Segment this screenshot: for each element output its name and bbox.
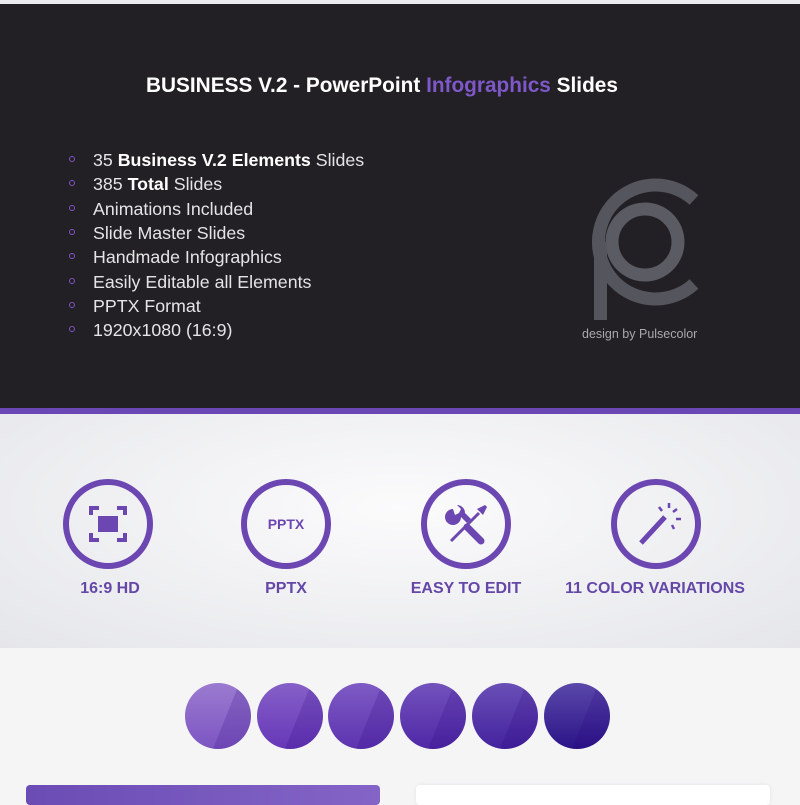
- label: easy to edit: EASY TO EDIT: [411, 580, 521, 597]
- feature list: [69, 150, 364, 340]
- icon: tools: [421, 479, 511, 569]
- logo caption: design by Pulsecolor: [582, 327, 697, 341]
- label: color variations: 11 COLOR VARIATIONS: [565, 580, 745, 597]
- top strip: [0, 0, 800, 4]
- feature list: 385 Total Slides: [93, 174, 222, 194]
- panel: white card bottom: [416, 785, 770, 805]
- panel: features: [0, 414, 800, 648]
- label: 16:9 HD: 16:9 HD: [80, 580, 140, 597]
- icon: 16:9 HD: [63, 479, 153, 569]
- icon: PPTX: [241, 479, 331, 569]
- feature list: Easily Editable all Elements: [93, 272, 311, 292]
- feature list: Handmade Infographics: [93, 247, 282, 267]
- feature list: 1920x1080 (16:9): [93, 320, 232, 340]
- title: BUSINESS V.2 - PowerPoint Infographics Slides: [146, 74, 618, 97]
- panel: dark header: [0, 4, 800, 408]
- panel: purple card bottom: [26, 785, 380, 805]
- purple divider bar: [0, 408, 800, 414]
- feature list: Animations Included: [93, 199, 253, 219]
- logo: pulsecolor: [582, 178, 698, 341]
- icon: magic wand: [611, 479, 701, 569]
- color swatches: [185, 683, 610, 749]
- feature list: 35 Business V.2 Elements Slides: [93, 150, 364, 170]
- feature list: PPTX Format: [93, 296, 201, 316]
- label: PPTX: PPTX: [265, 580, 307, 597]
- icon: PPTX: PPTX: [268, 516, 304, 532]
- feature list: Slide Master Slides: [93, 223, 245, 243]
